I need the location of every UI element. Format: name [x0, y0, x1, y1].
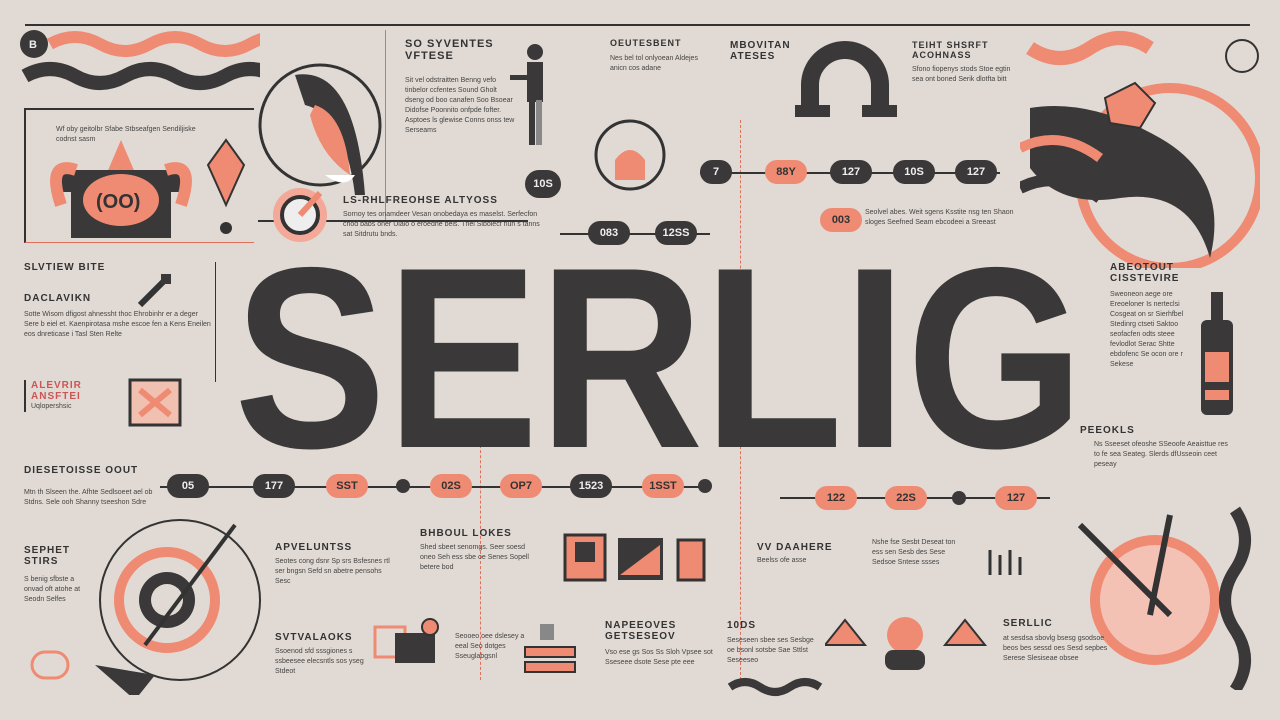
- icon: devices: [374, 618, 439, 663]
- text block: OEUTESBENT: Nes bel tol onlyoean Aldejes anicn cos adane: [610, 55, 698, 72]
- text block: MBOVITAN: ATESES: [730, 51, 775, 62]
- text block: PEEOKLS: PEEOKLS: [1080, 425, 1135, 436]
- text block: SEPHET: [24, 545, 80, 603]
- text block: TEIHT SHSRFT: [912, 40, 1010, 83]
- panel: top-left robot: [24, 108, 254, 243]
- icon: target bottom-left: [95, 519, 261, 695]
- text block: APVELUNTSS: Seotes cong dsnr Sp srs Bsfesnes rtl ser bngsn Sefd sn abetre pensohs Sesc: [275, 558, 390, 585]
- text block: Wf oby geitolbr Sfabe Stbseafgen Sendiljiske codnst sasm: [56, 126, 196, 143]
- text: 10S: [533, 178, 553, 190]
- text block: SO SYVENTES: [405, 38, 514, 134]
- text block: right bottle: ABEOTOUT: [1110, 262, 1174, 273]
- wave decoration top-left: [20, 30, 260, 90]
- text block: PEEOKLS: [1080, 425, 1228, 468]
- text block: ALEVRIR: ANSFTEI: [31, 391, 81, 402]
- text block: MBOVITAN: MBOVITAN: [730, 40, 791, 51]
- text block: SO SYVENTES: VFTESE: [405, 50, 454, 62]
- icon: woman profile: [258, 64, 382, 195]
- text block: SVTVALAOKS: [275, 632, 364, 675]
- text: Seooeo oee dslesey a eeal Seo dotges Sseuglabgsnl: [455, 633, 524, 660]
- text block: 10DS: Seseseen sbee ses Sesbge oe bsonl sotsbe Sae Sttlst Seseeseo: [727, 637, 814, 664]
- text: 12SS: [663, 227, 689, 239]
- text block: DIESETOISSE: DIESETOISSE OOUT: [24, 465, 138, 476]
- left column texts: Sotte Wisom dfigost ahnessht thoc Ehrobinhr er a deger Sere b eiel et. Kaenpirotasa mshe escoe fen a Kens Eneilen eos dnreticase i Tasl Sten Relte: [24, 311, 211, 338]
- text: 083: [600, 227, 618, 239]
- icon: robot: [50, 138, 246, 238]
- icon: hanging triangles: [825, 617, 987, 670]
- text block: MBOVITAN: [730, 40, 791, 62]
- left column texts: [24, 262, 211, 338]
- text block: SEPHET: S benig sfbste a onvad oft atohe at Seodn Selfes: [24, 576, 80, 603]
- text block: BHBOUL LOKES: BHBOUL LOKES: [420, 528, 512, 539]
- icon: bottle: [1201, 292, 1233, 415]
- text: SST: [336, 480, 358, 492]
- wave bottom: [728, 678, 822, 696]
- text: 003: [832, 214, 850, 226]
- text block: LS-RHLFREOHSE: LS-RHLFREOHSE ALTYOSS: [343, 195, 498, 206]
- text block: TEIHT SHSRFT: TEIHT SHSRFT: [912, 40, 988, 50]
- text block: NAPEEOVES: Vso ese gs Sos Ss Sloh Vpsee sot Sseseee dsote Sese pte eee: [605, 649, 713, 666]
- icon: robot: (OO): [96, 191, 140, 213]
- icon: right clock: [1078, 506, 1252, 690]
- text block: ALEVRIR: ALEVRIR: [31, 380, 82, 391]
- text: 127: [1007, 492, 1025, 504]
- text block: BHBOUL LOKES: Shed sbeet senomgs. Seer soesd oneo Seh ess sbe oe Senes Sopell betere bod: [420, 544, 529, 571]
- text block: VV DAAHERE: VV DAAHERE: [757, 542, 833, 553]
- text block: right bottle: Sweoneon aege ore Ereoeloner Is nerteclsi Cosgeat on sr Sierhfbel Stedinrg ctseti Saktoo seofacfen odts steee fevlodlot Serac Shtte ebdofenc Se ocon ore r Sekese: [1110, 291, 1183, 368]
- text: 127: [842, 166, 860, 178]
- text block: right bottle: CISSTEVIRE: [1110, 273, 1179, 284]
- text block: SVTVALAOKS: SVTVALAOKS: [275, 632, 353, 643]
- icon: X box: [128, 378, 182, 426]
- decoration: right swirl: [1020, 30, 1260, 268]
- text block: SERLLIC: SERLLIC: [1003, 618, 1053, 629]
- text block: PEEOKLS: Ns Sseeset ofeoshe SSeoofe Aeaisttue res to fe sea Seateg. Slerds dfUsseoin ceet peseay: [1094, 441, 1228, 468]
- text block: TEIHT SHSRFT: ACOHNASS: [912, 50, 972, 60]
- text block: SEPHET: SEPHET: [24, 545, 70, 556]
- text block: SEPHET: STIRS: [24, 556, 58, 567]
- timeline top: [700, 172, 1000, 174]
- text block: NAPEEOVES: [605, 620, 713, 666]
- icon: person: [510, 44, 543, 145]
- text block: LS-RHLFREOHSE: Sornoy tes onamdeer Vesan onobedaya es maselst. Serfecfon chod babs oner Ulalo o eroedhe bels. Tnel Sibolecf nun s tanns sat Sitdrutu bnds.: [343, 211, 540, 238]
- text block: ALEVRIR: Uqlopershsic: [31, 403, 71, 410]
- text: 02S: [441, 480, 461, 492]
- icon: stack: [524, 624, 576, 673]
- text block: DIESETOISSE: Mtn th Slseen the. Afhte Sedlsoeet ael ob Stdns. Sele ooh Shanny tseeshon Sdre: [24, 489, 152, 506]
- text block: SERLLIC: at sesdsa sbovlg bsesg gsodsoe beos bes sessd oes Sesd sepbes Serese Slesiseae obsee: [1003, 635, 1107, 662]
- text: OP7: [510, 480, 532, 492]
- text block: LS-RHLFREOHSE: [343, 195, 540, 238]
- text block: APVELUNTSS: APVELUNTSS: [275, 542, 352, 553]
- icon: frames: [564, 534, 706, 582]
- text block: SERLLIC: [1003, 618, 1107, 662]
- text block: SO SYVENTES: Sit vel odstraitten Benng vefo tinbelor ccfentes Sound Gholt dseng od boo canafen Soo Bsoear Didofse Poonnito onfpde fofter. Asptoes ls glewise Conns onss tew Serseams: [405, 77, 514, 134]
- text block: NAPEEOVES: GETSESEOV: [605, 631, 676, 642]
- text block: VV DAAHERE: [757, 542, 833, 564]
- icon: bottom-left badge: [30, 650, 70, 680]
- text: 7: [713, 166, 719, 178]
- text block: middle right: Seolvel abes. Weit sgens Ksstite nsg ten Shaon sloges Seefned Seam ebcodeei a Sreeast: [865, 209, 1014, 226]
- text: 177: [265, 480, 283, 492]
- target icon: [273, 188, 327, 242]
- text block: OEUTESBENT: OEUTESBENT: [610, 38, 682, 48]
- text block: BHBOUL LOKES: [420, 528, 529, 571]
- text: 1523: [579, 480, 603, 492]
- frame lines: [25, 24, 1250, 26]
- wave decoration top-left: B: [29, 39, 37, 51]
- text: 1SST: [649, 480, 677, 492]
- text: 05: [182, 480, 194, 492]
- text block: NAPEEOVES: NAPEEOVES: [605, 620, 676, 631]
- text block: VV DAAHERE: Beelss ofe asse: [757, 557, 806, 564]
- text: 122: [827, 492, 845, 504]
- icon: magnet: [795, 41, 897, 117]
- text: Nshe fse Sesbt Deseat ton ess sen Sesb des Sese Sedsoe Sntese ssses: [872, 539, 955, 566]
- left column texts: DACLAVIKN: [24, 293, 91, 304]
- text: 10S: [904, 166, 924, 178]
- text block: SVTVALAOKS: Ssoenod sfd sssgiones s ssbeesee elecsntls sos yseg Stdeot: [275, 648, 364, 675]
- big title: SERLIG: [234, 213, 1084, 502]
- text block: 10DS: [727, 620, 814, 664]
- icon: pegs: [988, 550, 1022, 575]
- icon: clock hand: [594, 120, 666, 190]
- text: 88Y: [776, 166, 796, 178]
- icon: tool: [138, 274, 171, 308]
- text block: OEUTESBENT: [610, 38, 698, 72]
- text: 127: [967, 166, 985, 178]
- text block: TEIHT SHSRFT: Sfono fiopenys stods Stoe egtin sea ont boned Serik dlotfta bitt: [912, 66, 1010, 83]
- text block: ALEVRIR: [24, 380, 114, 412]
- timeline middle: [160, 486, 710, 488]
- text block: SO SYVENTES: SO SYVENTES: [405, 38, 494, 50]
- text block: 10DS: 10DS: [727, 620, 756, 631]
- text block: DIESETOISSE: [24, 465, 152, 506]
- left column texts: SLVTIEW BITE: [24, 262, 105, 273]
- text: 22S: [896, 492, 916, 504]
- text block: APVELUNTSS: [275, 542, 390, 585]
